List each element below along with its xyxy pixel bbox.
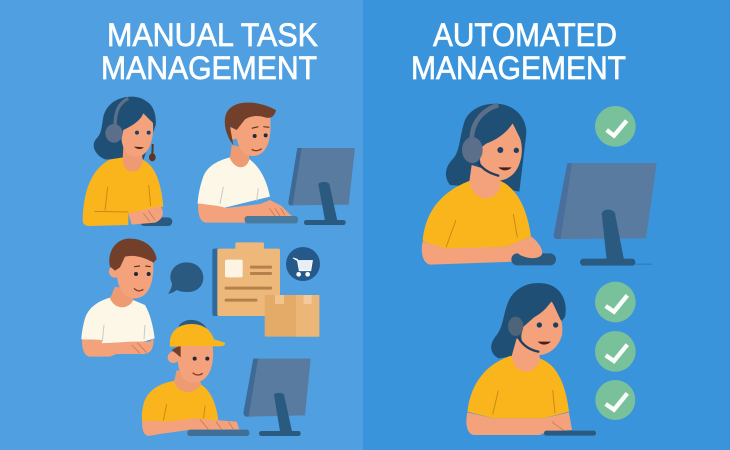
panel: automated management background bbox=[363, 0, 730, 450]
monitor: right bbox=[554, 163, 657, 266]
icon: speech bubble bbox=[168, 262, 203, 294]
icon: clipboard document bbox=[212, 242, 280, 316]
icons: three green checks bbox=[595, 282, 636, 420]
title: manual task management: MANUAL TASK bbox=[107, 17, 318, 53]
panel: manual task management background bbox=[0, 0, 363, 450]
title: automated management bbox=[411, 17, 626, 86]
woman with headset at keyboard, automated bbox=[466, 283, 596, 436]
man in white shirt at computer bbox=[198, 102, 298, 223]
icon: shopping cart bbox=[286, 247, 320, 281]
man in white shirt bbox=[81, 239, 157, 357]
monitor: top left bbox=[288, 148, 355, 225]
icon: green check bbox=[595, 106, 636, 147]
title: automated management: MANAGEMENT bbox=[411, 50, 626, 86]
monitor: bottom left bbox=[243, 359, 311, 436]
title: manual task management: MANAGEMENT bbox=[101, 50, 317, 86]
icon: cardboard box bbox=[265, 295, 319, 337]
man in yellow cap and shirt at computer bbox=[142, 320, 249, 436]
woman with headset and mouse bbox=[83, 97, 172, 226]
title: manual task management bbox=[101, 17, 318, 86]
woman with headset and mouse, automated bbox=[422, 104, 556, 265]
title: automated management: AUTOMATED bbox=[433, 17, 617, 53]
